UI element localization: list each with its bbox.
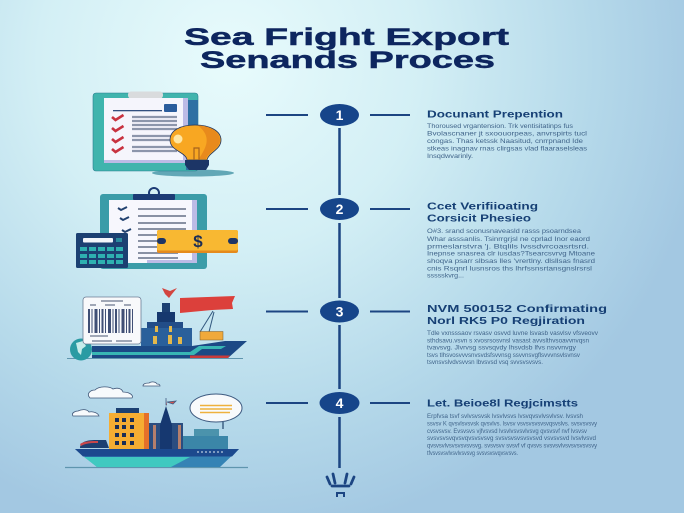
step 1 text	[427, 110, 587, 160]
step 4 marker: 4	[336, 395, 344, 411]
timeline	[266, 104, 410, 468]
speech bubble	[190, 394, 242, 429]
clouds	[72, 382, 160, 416]
step 1 marker	[320, 104, 359, 126]
step 2 marker: 2	[336, 201, 344, 217]
step 3 text: Norl RK5 P0 Regjiration	[427, 316, 585, 327]
title	[184, 24, 509, 74]
step 3 text: sthdsavu.vsvn s xvosrsosvnsl vasast avvslthvsoavvnvqsn	[427, 338, 589, 344]
step 4 text	[427, 398, 598, 457]
step 4 marker	[320, 392, 360, 414]
step 4 text: Erpfvsa tsvf svlvsvsvsk lvsvlvsvs lvsvqvsvlvsvlvsv. lvsvsh	[427, 413, 583, 420]
step 1 marker: 1	[336, 107, 344, 123]
step 3 text: Tdle vxnsssaov rsvasv osvvd luvne lsvasb vasvlsv vfsveovv	[427, 330, 599, 337]
step 4 text: ssvsv K qvsvlsvsvsk qvsvlvs. lsvsv vsvsvsvsvsvqsvslvs. svsvsvsvy	[427, 420, 598, 428]
step 3 text: NVM 500152 Confirmating	[427, 304, 607, 315]
step 2 marker	[320, 198, 359, 220]
step 4 text: Let. Beioe8l Regjcimstts	[427, 398, 579, 410]
step 1 text: Insqdwvarinly.	[427, 153, 473, 160]
step 2 text: Inepnse snasrea clr iusdas?Tsearcsvrvg Mtoane	[427, 250, 596, 258]
step 2 text: shoqva psarr slbsas lles 'vrertlny. dlsllsas fnasrd	[427, 258, 596, 265]
icon: clipboard with light bulb	[93, 92, 234, 176]
step 2 text: cnis Rsqnrl lusnsros ths lhrfssnsrtansgnslrsrsl	[427, 266, 592, 272]
step 1 text: Docunant Prepention	[427, 110, 563, 120]
icon: clipboard with calculator and money: $	[193, 232, 203, 251]
step 3 text: tsvs tlhsvosvvvsnvsvdsfsvvnsg ssvvnsvgflsvvvnsvlsvnsv	[427, 352, 581, 359]
step 2 text: Whar asssanlis. Tsinrrgrjsl ne cprlad Inor eaord	[427, 236, 591, 243]
title: Sea Fright Export	[184, 24, 509, 51]
title: Senands Proces	[200, 47, 495, 74]
step 2 text: prmeslarstvra 'j. Btqlils lvssdvrcoasrtsrd.	[427, 244, 589, 250]
step 2 text: O#3. srand sconusnaveasld rasss psoarndsea	[427, 228, 582, 235]
step 1 text: Bvolascnaner jt sxoouorpeas, anvrspirts tucl	[427, 130, 587, 138]
step 2 text	[427, 202, 596, 280]
step 4 text: svsvsvsvqvsvqvsvsvsvg svsvsvsvsvsvsvd vsvsvsvd lvsvlvsvd	[427, 435, 596, 442]
step 3 marker	[320, 300, 359, 322]
step 4 text: qvsvsvlvsvsvsvsvsvg. svsvsvv svsvf vf qvsvs svsvsvlvsvsvsvsvsvy	[427, 442, 598, 450]
icon: cargo ship with barcode and flag	[67, 288, 247, 360]
icon: bottom anchor mark	[327, 474, 354, 497]
step 3 marker: 3	[336, 304, 344, 320]
step 4 text: tfvsvsvsvlvsvlvsvsvg svsvsvsvqvsvsvs.	[427, 450, 518, 457]
step 4 text: cvsvsvsv. Evsvsvs vjfvsvsd lvsvlvsvsvlvsvg qvsvsvf nvf lvsvsv	[427, 428, 588, 435]
step 1 text: stkeas inagnav rnas clirgsas vlad flaaraselsleas	[427, 146, 587, 152]
step 2 text: Corsicit Phesieo	[427, 214, 531, 224]
step 3 text	[427, 304, 607, 366]
step 1 text: Thoroused vrgantension. Trk ventisitatinps fus	[427, 123, 573, 130]
step 2 text: ssssskvrg...	[427, 272, 464, 280]
step 2 text: Ccet Verifiioating	[427, 202, 538, 212]
icon: city ship with clouds and speech bubble	[65, 382, 248, 468]
step 3 text: tsvnsvslvdvsvvsn lbvsvsd vsq svvsvsvsvs.	[427, 359, 543, 366]
icon: clipboard with calculator and money	[76, 188, 238, 269]
step 1 text: congas. Thas ketssk Naasitud, cnrrpnand Ide	[427, 138, 584, 145]
step 3 text: tvavsvg. Jlvrvsg ssvsqvdy lhsvdsb lfvs nsvvnvgy	[427, 344, 577, 352]
